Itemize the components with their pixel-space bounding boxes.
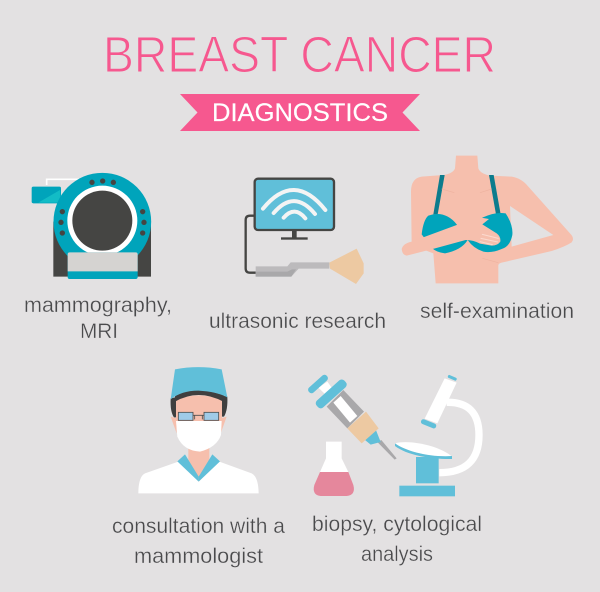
icon: doctor xyxy=(138,367,259,493)
label: biopsy, cytological analysis: analysis xyxy=(361,542,433,566)
banner: diagnostics: DIAGNOSTICS xyxy=(212,99,388,127)
label: mammography, MRI: mammography, xyxy=(24,293,172,317)
icon: ultrasound monitor and probe xyxy=(246,179,364,284)
icon: syringe xyxy=(307,373,397,460)
label: biopsy, cytological analysis xyxy=(312,512,482,566)
icon: flask xyxy=(314,442,354,496)
banner: diagnostics xyxy=(180,94,420,131)
label: mammography, MRI xyxy=(24,293,172,343)
label: ultrasonic research: ultrasonic research xyxy=(209,309,386,333)
label: self-examination: self-examination xyxy=(420,299,574,323)
label: consultation with a mammologist: consultation with a xyxy=(112,514,285,538)
label: consultation with a mammologist xyxy=(112,514,285,568)
label: biopsy, cytological analysis: biopsy, cytological xyxy=(312,512,482,536)
label: consultation with a mammologist: mammologist xyxy=(134,544,263,568)
title: BREAST CANCER xyxy=(103,26,496,83)
icon: MRI scanner xyxy=(32,173,151,279)
icon: self-examination torso xyxy=(402,156,573,283)
label: mammography, MRI: MRI xyxy=(80,319,118,343)
icon: microscope xyxy=(395,375,479,496)
